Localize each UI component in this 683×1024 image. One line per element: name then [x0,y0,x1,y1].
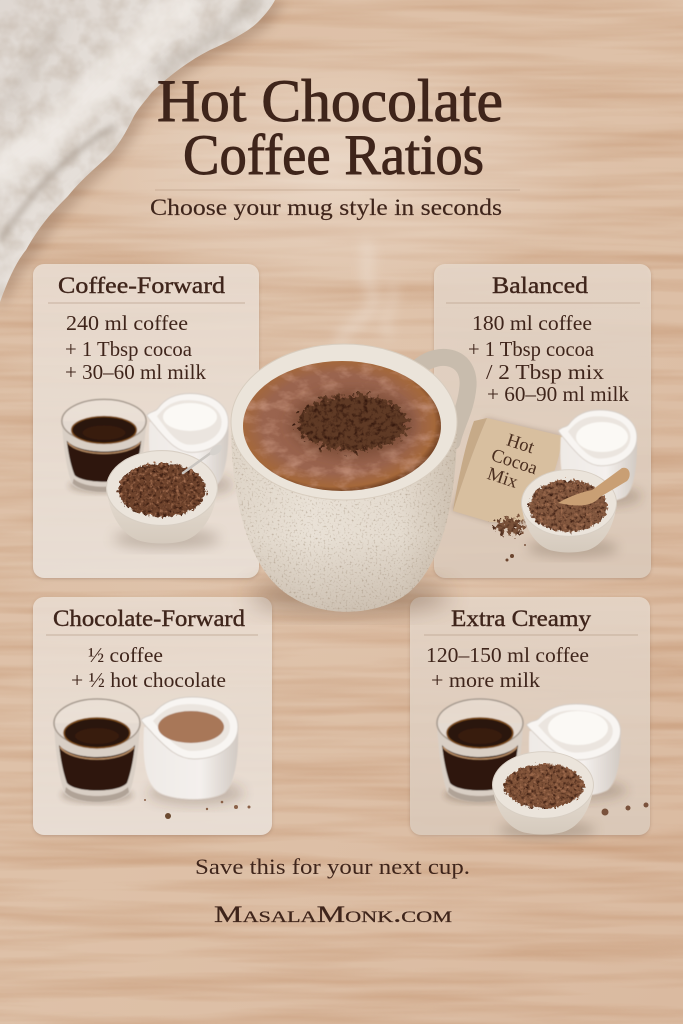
steam [340,245,394,340]
subtitle: Choose your mug style in seconds [150,195,502,220]
icon: coffee shot glass [54,699,140,804]
title: Hot Chocolate [157,68,503,134]
ratio text: 240 ml coffee [66,311,188,335]
cocoa pile halo [290,390,414,458]
ratio text: ½ coffee [88,643,163,667]
ratio text: 120–150 ml coffee [426,643,589,667]
ratio text: + more milk [431,668,541,692]
cocoa pile [298,395,408,451]
icon: milk jug [147,394,233,496]
ratio text: 180 ml coffee [472,311,592,335]
ratio text [65,311,207,384]
mug shadow [250,580,450,612]
ratio text: + ½ hot chocolate [71,668,226,692]
icon: cocoa bowl [492,752,596,839]
mug rim [231,344,457,500]
coffee surface [243,361,441,491]
linen cloth [0,0,285,312]
icon: cocoa bowl with spoon [106,443,224,548]
icon: milk jug [558,410,642,507]
ratio text: / 2 Tbsp mix [486,360,605,384]
cocoa crumbs [602,802,648,816]
ratio text: + 30–60 ml milk [65,360,207,384]
heading: Balanced: Balanced [492,273,588,299]
heading: Coffee-Forward: Coffee-Forward [58,273,225,299]
icon: hot cocoa mix pouch: Hot [504,431,537,458]
icon: hot chocolate jug [141,697,244,805]
icon: coffee shot glass [437,699,523,804]
panel: Chocolate-Forward [33,597,272,835]
ratio text: + 60–90 ml milk [487,382,630,406]
ratio text [468,311,630,406]
title [157,68,503,187]
icon: cocoa bowl with wooden scoop [522,468,630,557]
icon: hot cocoa mix pouch: Cocoa [489,446,540,479]
ratio text [426,643,589,692]
cocoa crumbs [144,799,250,819]
ratio text: + 1 Tbsp cocoa [468,337,595,361]
icon: cocoa spill [495,518,526,562]
mug body [231,424,457,612]
ratio text: + 1 Tbsp cocoa [65,337,193,361]
footer note: Save this for your next cup. [195,854,470,879]
hero mug [231,344,468,612]
heading: Chocolate-Forward: Chocolate-Forward [53,606,245,632]
icon: milk jug [526,704,626,801]
heading: Extra Creamy: Extra Creamy [451,606,591,632]
website: MasalaMonk.com [214,902,452,927]
panel: Balanced [434,264,651,578]
panel: Coffee-Forward [33,264,259,578]
panel: Extra Creamy [410,597,650,839]
icon: hot cocoa mix pouch [452,418,562,524]
ratio text [71,643,226,692]
mug handle [420,357,468,442]
icon: coffee shot glass [62,399,146,494]
icon: hot cocoa mix pouch: Mix [485,464,521,493]
title: Coffee Ratios [183,124,484,187]
